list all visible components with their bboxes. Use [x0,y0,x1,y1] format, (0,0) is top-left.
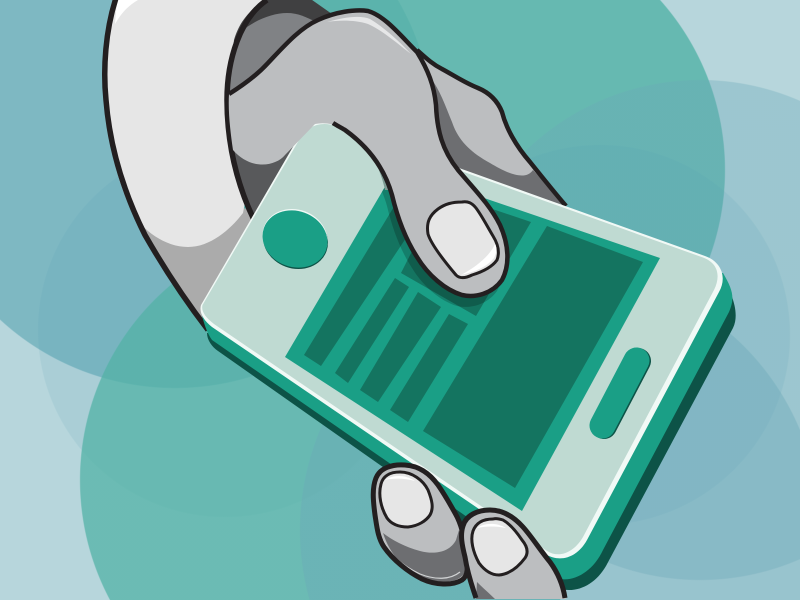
lower finger two [462,510,566,599]
nail one [380,472,432,527]
sleeve and palm [105,0,340,330]
finger one shadow [383,530,465,582]
illustration: hand holding a smartphone [102,0,736,599]
screen: small strip three [390,314,468,422]
nail two [472,519,527,575]
phone screen [285,168,660,511]
screen: small strip two [360,292,441,402]
finger shadow sliver on the phone face [362,144,390,190]
screen: tall left strip [304,205,410,366]
finger one rim light [383,540,460,578]
fingernail [427,202,498,278]
screen: top strip [401,192,531,316]
screen: small strip one [335,278,409,383]
lower finger one [373,465,467,584]
nail two highlight [477,524,506,528]
phone body side: green edge [201,273,732,579]
screen: main content panel [423,226,643,488]
phone face with white highlight [200,122,723,558]
finger highlight [327,17,411,54]
back finger behind the phone [417,50,566,206]
speaker pill [602,360,638,426]
home button [254,200,336,278]
finger shadow on the screen [382,188,499,307]
phone body side: dark edge [207,297,736,590]
nail one highlight [385,476,415,481]
finger two shadow [476,582,495,599]
main finger [229,10,507,296]
